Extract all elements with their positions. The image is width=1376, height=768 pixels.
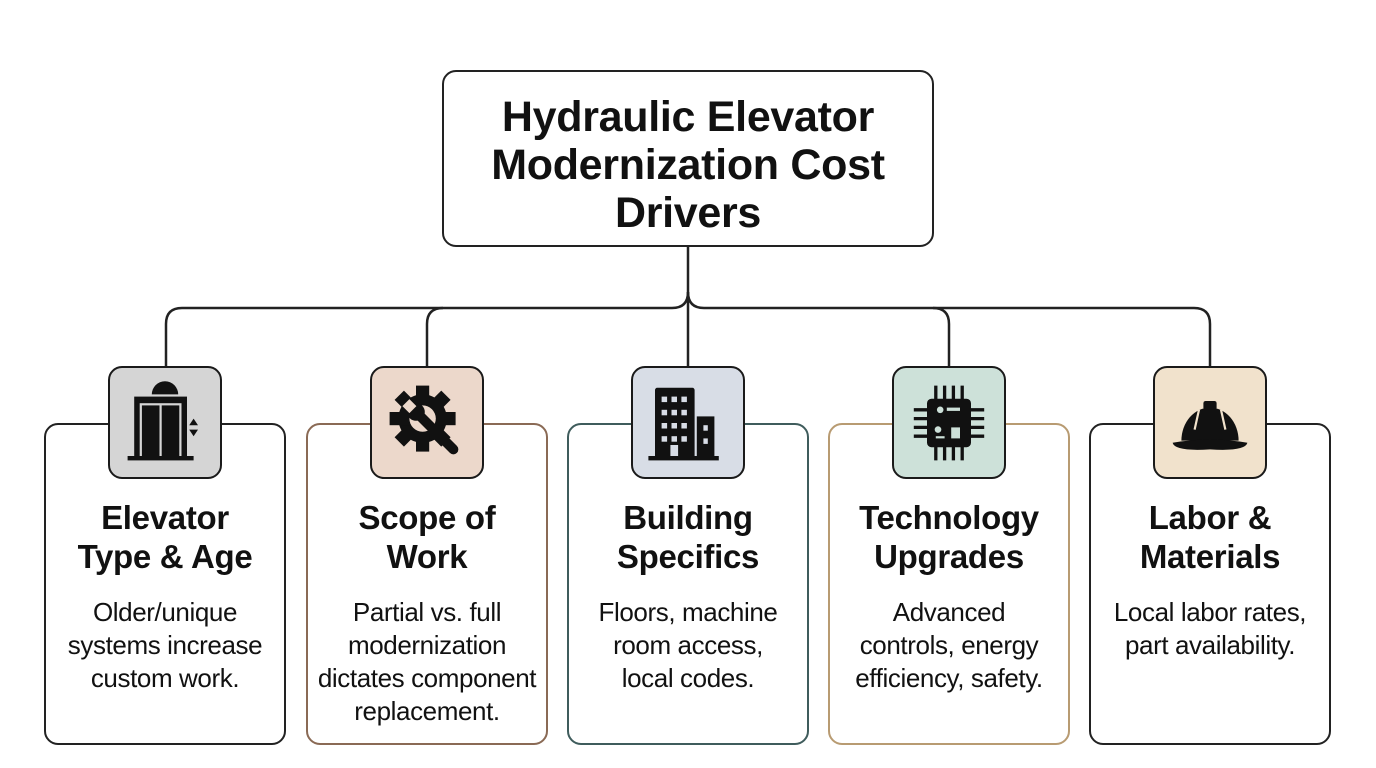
card: technology: efficiency, safety. (855, 663, 1043, 693)
title: Drivers (615, 188, 761, 236)
card: building: Building (623, 499, 753, 536)
icon: chip (892, 366, 1006, 479)
card: labor: Local labor rates, (1114, 597, 1306, 627)
card: technology: Upgrades (874, 538, 1024, 575)
card: elevator type: Type & Age (78, 538, 252, 575)
title (442, 70, 934, 247)
card: labor (1089, 423, 1331, 745)
card: elevator type: systems increase (68, 630, 262, 660)
card: scope: dictates component (318, 663, 536, 693)
title: Hydraulic Elevator (502, 92, 874, 140)
card: building: room access, (613, 630, 763, 660)
card: building (567, 423, 809, 745)
card: elevator type: Elevator (101, 499, 229, 536)
card: building: local codes. (622, 663, 754, 693)
card: labor: Labor & (1149, 499, 1271, 536)
card: elevator type (44, 423, 286, 745)
card: technology: Technology (859, 499, 1039, 536)
icon: hard hat (1153, 366, 1267, 479)
icon: gear wrench (370, 366, 484, 479)
card: labor: part availability. (1125, 630, 1295, 660)
card: technology: Advanced (893, 597, 1005, 627)
card: scope: Scope of (359, 499, 495, 536)
card: technology: controls, energy (860, 630, 1038, 660)
card: scope: Partial vs. full (353, 597, 501, 627)
card: scope: modernization (348, 630, 506, 660)
card: elevator type: Older/unique (93, 597, 237, 627)
card: elevator type: custom work. (91, 663, 239, 693)
card: building: Specifics (617, 538, 759, 575)
icon: elevator (108, 366, 222, 479)
title: Modernization Cost (491, 140, 885, 188)
card: scope (306, 423, 548, 745)
card: labor: Materials (1140, 538, 1280, 575)
card: building: Floors, machine (599, 597, 777, 627)
icon: building (631, 366, 745, 479)
card: scope: replacement. (354, 696, 500, 726)
card: scope: Work (387, 538, 467, 575)
card: technology (828, 423, 1070, 745)
